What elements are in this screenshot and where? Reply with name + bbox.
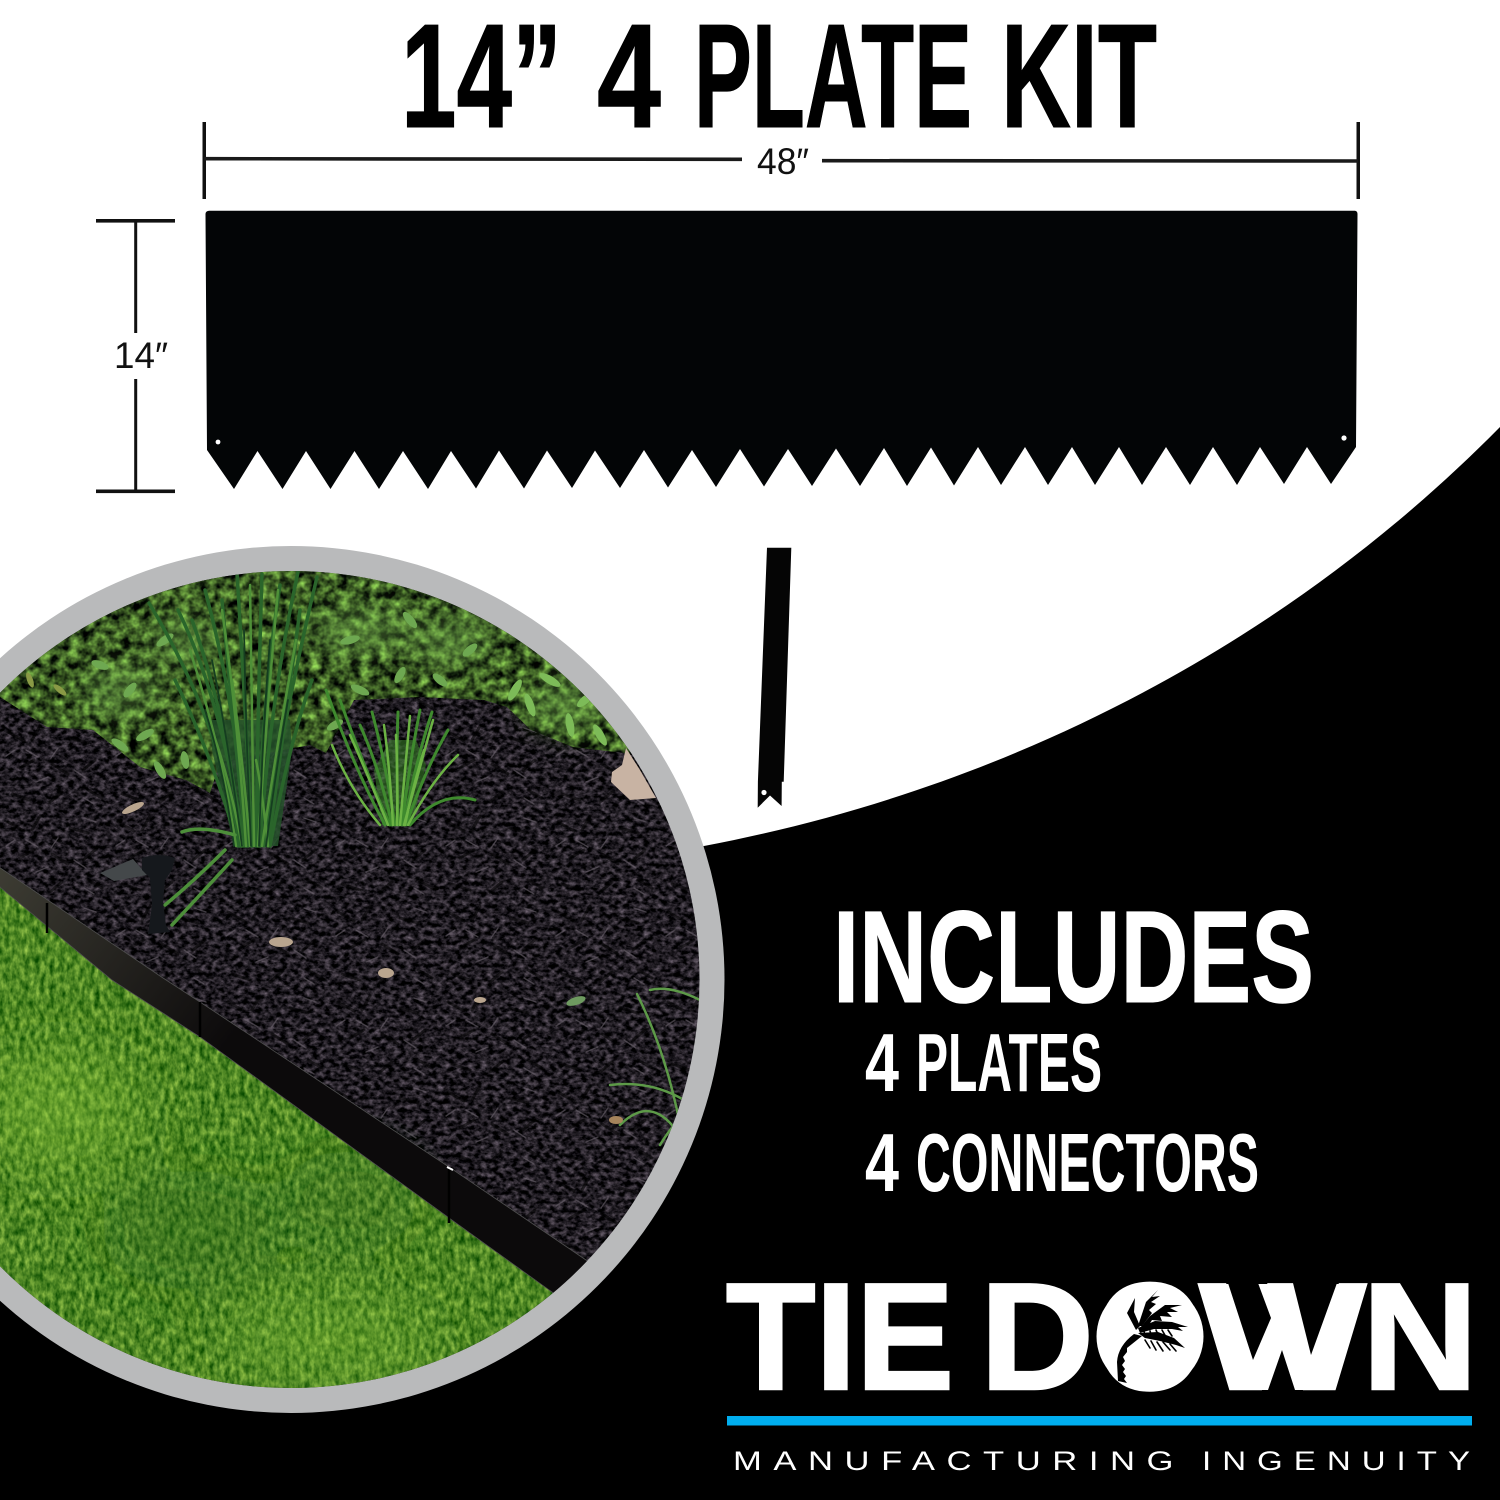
photo frame ring [0, 546, 724, 1413]
list item: 4 connectors: 4 [865, 1116, 899, 1209]
logo: Tie Down [726, 1252, 1478, 1422]
mounting holes [216, 435, 1347, 444]
includes heading: INCLUDES [833, 883, 1314, 1030]
foliage leaves [24, 610, 609, 781]
height dimension: 14 inches [96, 219, 175, 493]
mulch debris [121, 800, 623, 1124]
metal edging strip [0, 861, 620, 1300]
tagline: MANUFACTURING [733, 1446, 1185, 1476]
tall grass clump [149, 572, 317, 925]
palm fronds [1127, 1290, 1188, 1348]
logo W heavy letterform [1198, 1283, 1365, 1390]
tagline: INGENUITY [1202, 1446, 1481, 1476]
logo wordmark: D [980, 1252, 1094, 1422]
fallen green leaf [566, 996, 586, 1006]
list item: 4 plates: 4 [865, 1016, 899, 1109]
label: 14 inch: 14″ [114, 335, 168, 376]
connector stake [758, 548, 791, 808]
second grass clump [326, 690, 475, 825]
stone [611, 748, 656, 800]
list item: 4 connectors: CONNECTORS [916, 1116, 1259, 1209]
edging plate with spiked bottom [206, 211, 1358, 489]
lawn light and shadow [0, 1050, 440, 1380]
logo wordmark: O [1095, 1252, 1205, 1422]
small leaning blades [165, 829, 235, 925]
mulch bed [0, 570, 710, 1390]
blue divider bar [727, 1416, 1472, 1426]
list item: 4 plates: PLATES [916, 1016, 1102, 1109]
logo wordmark: W [1199, 1252, 1367, 1422]
logo wordmark: TIE [726, 1252, 954, 1422]
width dimension: 48 inches [202, 122, 1360, 199]
foliage light patches [82, 608, 601, 731]
logo wordmark: N [1362, 1252, 1478, 1422]
black curved background panel [0, 427, 1500, 1500]
label: 48 inch: 48″ [757, 141, 809, 182]
palm frond spikes [1144, 1330, 1176, 1351]
palm trunk [1117, 1334, 1142, 1383]
background foliage [0, 571, 632, 793]
green low plant beside bed [610, 989, 700, 1147]
grass lawn [0, 888, 553, 1388]
stake hole [761, 790, 767, 795]
logo O disc with palm [1096, 1283, 1204, 1390]
solar garden light [100, 855, 175, 934]
mulch chips [0, 570, 710, 1390]
photo: garden bed with edging [0, 560, 720, 1400]
